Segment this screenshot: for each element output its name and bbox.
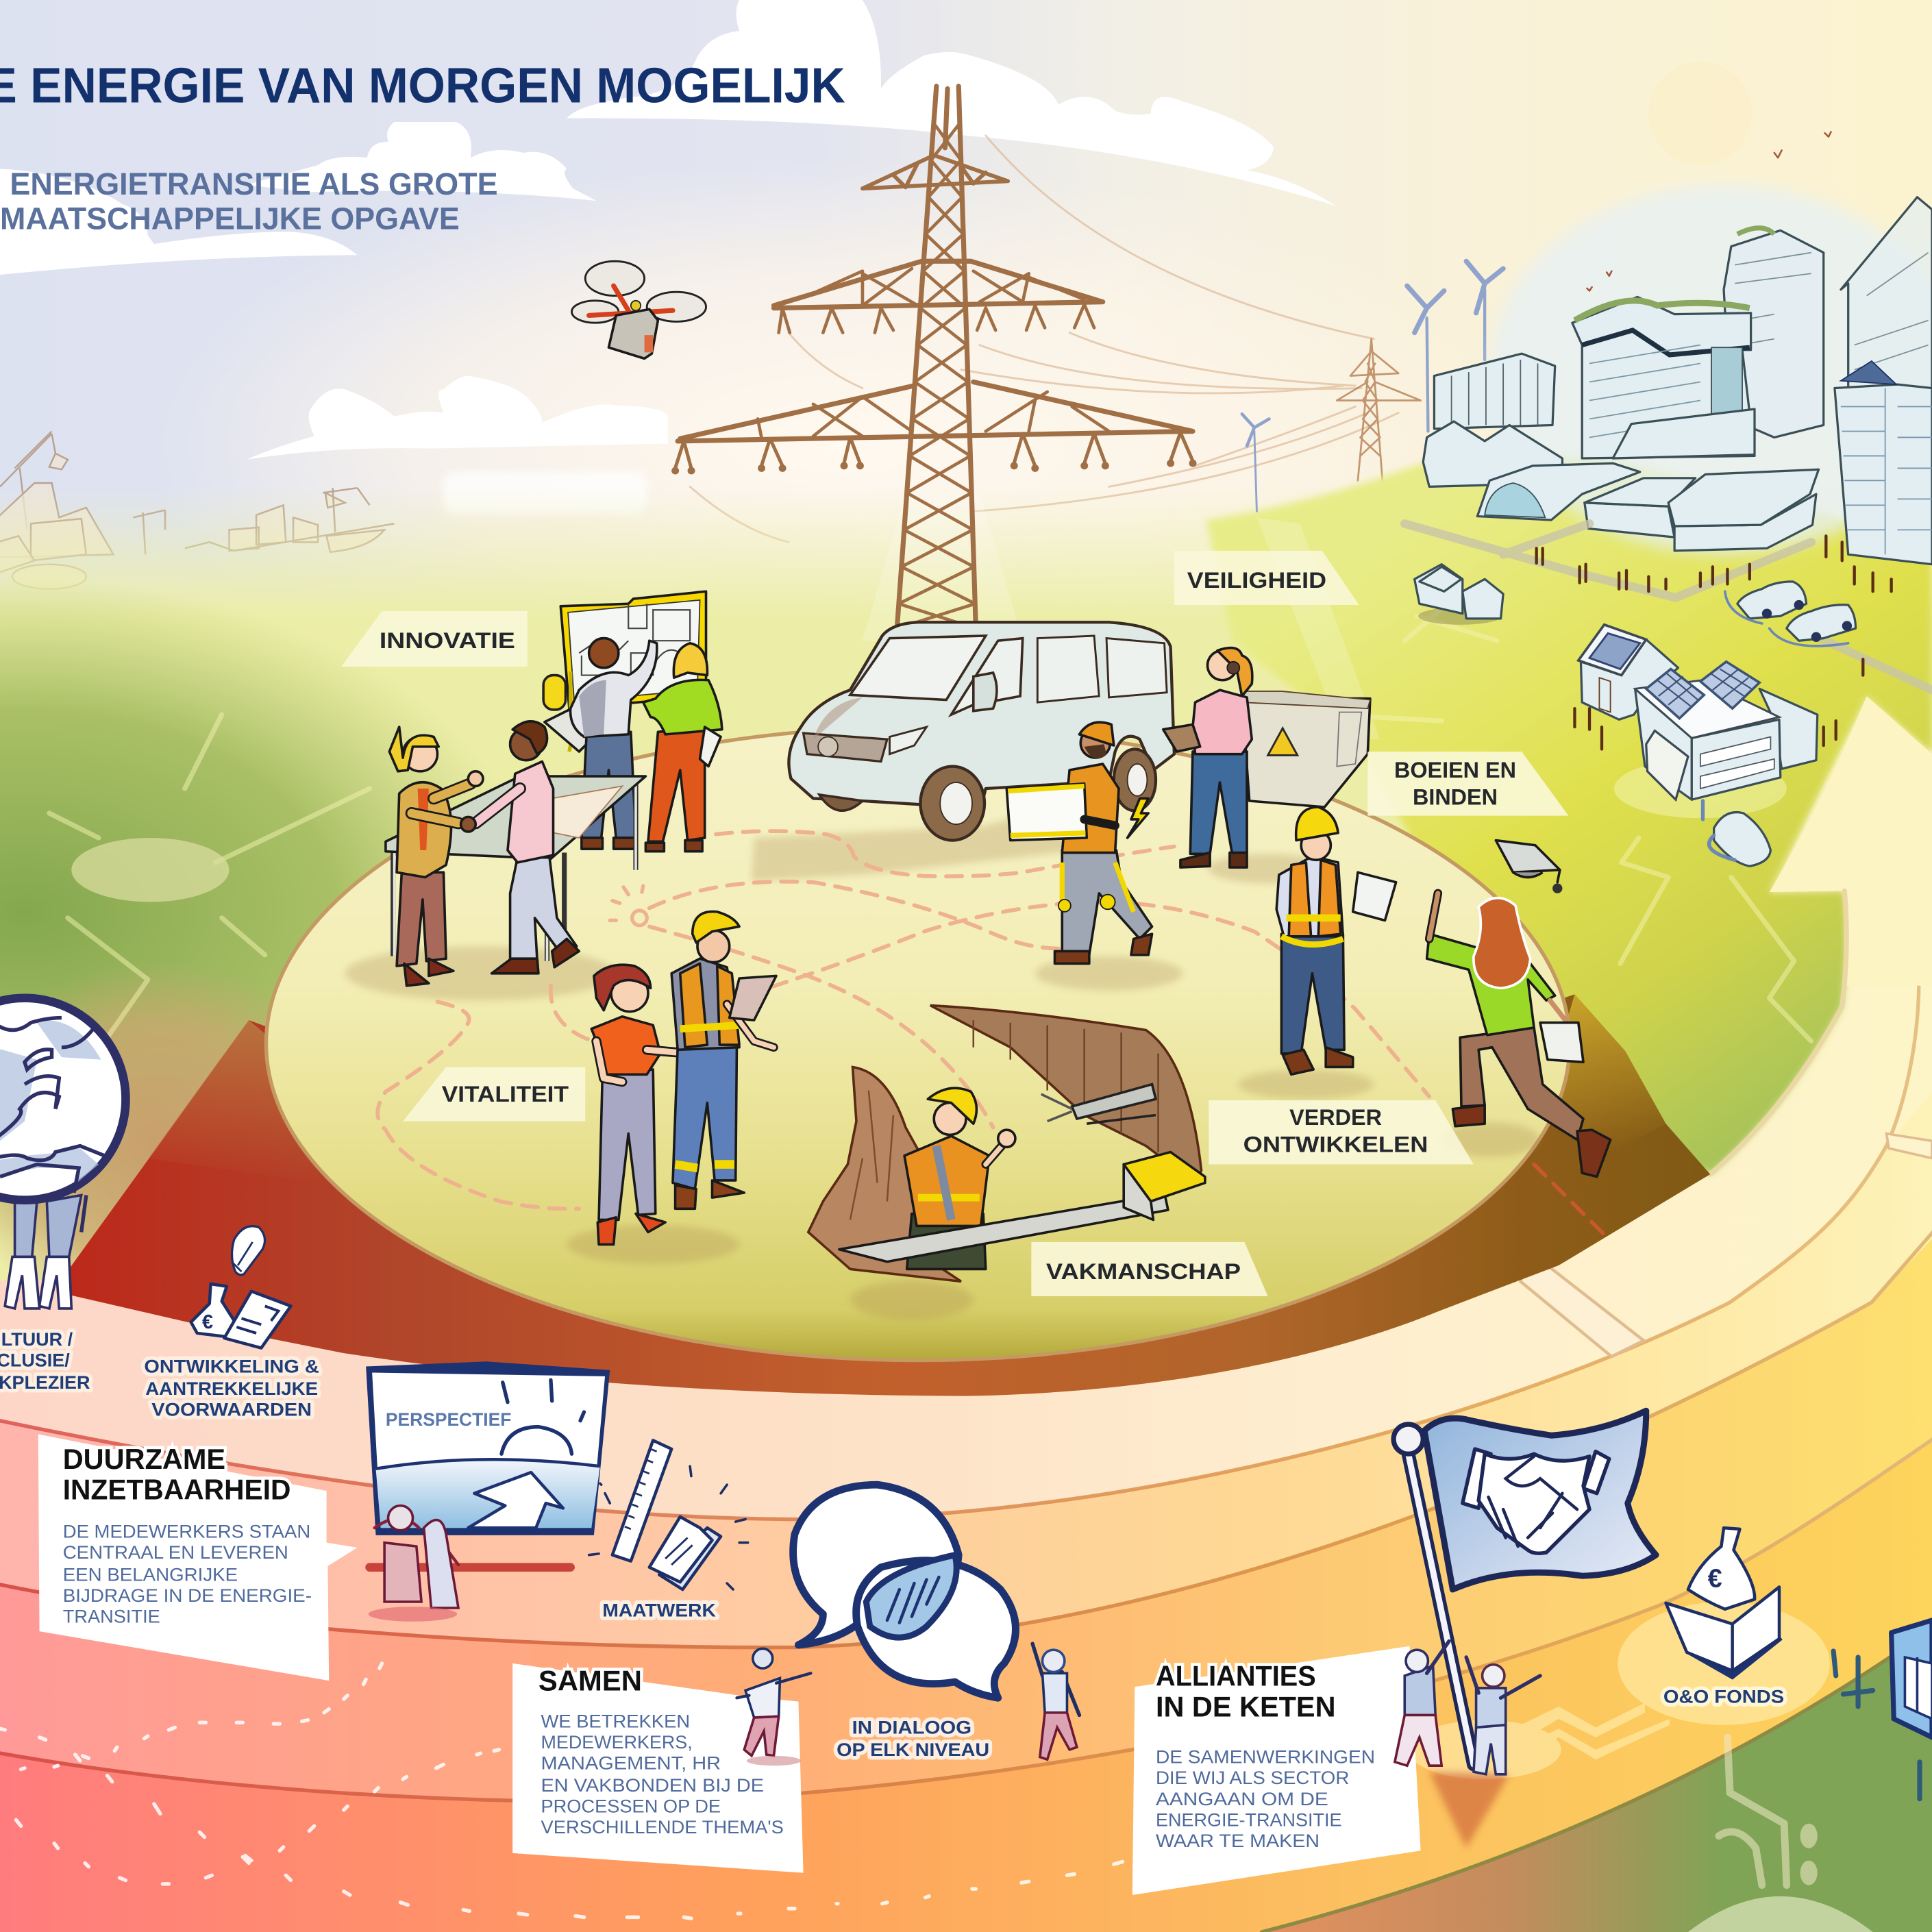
person left of pole bbox=[1395, 1642, 1449, 1766]
middle arm bbox=[773, 261, 1103, 333]
pale circuit marks bbox=[49, 604, 1811, 1041]
ring contour lines bbox=[0, 932, 1932, 1932]
flag with handshake bbox=[1394, 1411, 1656, 1848]
turbine one bbox=[1407, 286, 1444, 431]
clouds bbox=[0, 0, 1336, 514]
green outer corner bbox=[1232, 1589, 1932, 1932]
town people bbox=[1537, 536, 1892, 749]
body text: EEN BELANGRIJKE bbox=[63, 1564, 238, 1585]
text: in dialoog op elk niveau bbox=[837, 1717, 989, 1760]
heading: INZETBAARHEID bbox=[63, 1474, 290, 1506]
small farm house bbox=[1415, 565, 1503, 625]
pale ground decorations on ring bbox=[1409, 1602, 1830, 1779]
label: vitaliteit: VITALITEIT bbox=[442, 1082, 569, 1106]
body text: DE MEDEWERKERS STAAN bbox=[63, 1521, 310, 1541]
dashed routes on disc bbox=[377, 831, 1608, 1238]
pylon tower bbox=[897, 86, 976, 628]
text: cultuur inclusie werkplezier bbox=[0, 1329, 90, 1393]
heading: SAMEN bbox=[538, 1665, 642, 1697]
heading bbox=[1156, 1660, 1336, 1722]
body text: CENTRAAL EN LEVEREN bbox=[63, 1542, 288, 1563]
main pylon bbox=[676, 86, 1193, 628]
body text: MEDEWERKERS, bbox=[541, 1732, 693, 1753]
label: verder ontwikkelen: ONTWIKKELEN bbox=[1243, 1132, 1428, 1157]
title: E ENERGIE VAN MORGEN MOGELIJK bbox=[0, 58, 845, 113]
body text: MANAGEMENT, HR bbox=[541, 1753, 721, 1774]
cable sleeves bbox=[1041, 1085, 1156, 1124]
icon: ruler and documents bbox=[589, 1440, 748, 1589]
white dotted path in red zone bbox=[0, 1663, 1122, 1918]
people under globe bbox=[5, 1196, 86, 1309]
icon: money and contract: € bbox=[202, 1311, 213, 1333]
lower terrace bbox=[1613, 409, 1755, 458]
shadow under flag bbox=[1429, 1772, 1509, 1848]
bubble two bbox=[856, 1561, 1015, 1698]
charging car bbox=[1702, 801, 1770, 866]
running woman bbox=[1427, 893, 1611, 1177]
houses row bbox=[1423, 421, 1562, 486]
man in pink jacket bbox=[461, 721, 579, 974]
perspectief board bbox=[366, 1361, 610, 1535]
body text bbox=[1156, 1747, 1375, 1851]
body text bbox=[541, 1711, 784, 1837]
icon: lightbulb bbox=[232, 1226, 265, 1275]
table with plans bbox=[386, 776, 645, 961]
label: innovatie: INNOVATIE bbox=[380, 628, 515, 653]
subtitle: ENERGIETRANSITIE ALS GROTE bbox=[10, 166, 498, 201]
future city bbox=[1404, 185, 1932, 690]
body text: AANGAAN OM DE bbox=[1156, 1789, 1328, 1809]
drone bbox=[571, 261, 706, 358]
money box bbox=[1666, 1528, 1782, 1679]
text: maatwerk: MAATWERK bbox=[602, 1600, 716, 1621]
trench dirt bbox=[930, 1006, 1202, 1183]
body text: EN VAKBONDEN BIJ DE bbox=[541, 1775, 764, 1796]
low roof building right bbox=[1668, 469, 1819, 551]
first ring band bbox=[0, 696, 1932, 1520]
girl with orange shirt bbox=[591, 965, 702, 1244]
route start marker bbox=[610, 886, 647, 926]
mound under disc bbox=[59, 994, 1710, 1396]
board bbox=[560, 591, 706, 752]
body text: WE BETREKKEN bbox=[541, 1711, 690, 1731]
ground hills bbox=[0, 486, 1932, 1349]
road bbox=[1404, 523, 1932, 690]
label: vakmanschap bbox=[1031, 1242, 1268, 1296]
van rear wheel bbox=[1114, 749, 1156, 810]
house one bbox=[1578, 625, 1679, 719]
body text: BIJDRAGE IN DE ENERGIE- bbox=[63, 1585, 312, 1606]
text: ontwikkeling en aantrekkelijke voorwaarden bbox=[144, 1356, 319, 1420]
two people at board bbox=[369, 1506, 458, 1622]
worker with exoskeleton and box bbox=[1006, 722, 1152, 963]
roll and keyboard bbox=[543, 676, 591, 752]
distant pylon bbox=[1337, 339, 1421, 480]
handshake icon bbox=[1463, 1449, 1609, 1553]
turbine three bbox=[1242, 414, 1269, 511]
label: vakmanschap: VAKMANSCHAP bbox=[1046, 1259, 1241, 1284]
van bbox=[789, 622, 1174, 841]
man at board bbox=[571, 639, 657, 849]
person walking on samen card bbox=[736, 1648, 810, 1766]
person waving bbox=[1032, 1644, 1079, 1759]
pale circuit in green corner bbox=[1688, 1737, 1873, 1932]
globe carried by people bbox=[0, 998, 125, 1309]
turbine two bbox=[1466, 261, 1503, 360]
worker in trench bbox=[904, 1088, 1015, 1269]
trench with worker bbox=[808, 1006, 1205, 1281]
panel: duurzame inzetbaarheid bbox=[38, 1434, 358, 1681]
glow behind city bbox=[1491, 185, 1932, 554]
body text bbox=[63, 1521, 312, 1627]
worker with tablet bbox=[671, 912, 776, 1209]
label: boeien en binden: BINDEN bbox=[1413, 784, 1498, 809]
panel: allianties in de keten bbox=[1132, 1646, 1421, 1895]
label: verder ontwikkelen: VERDER bbox=[1289, 1105, 1382, 1130]
label: vitaliteit bbox=[403, 1067, 585, 1122]
speech bubbles bbox=[793, 1485, 1015, 1698]
flag cloth bbox=[1424, 1411, 1656, 1589]
body text: PROCESSEN OP DE bbox=[541, 1796, 721, 1817]
pole bbox=[1409, 1454, 1474, 1764]
green land inside ring, right side bbox=[1206, 456, 1932, 1174]
low roof building left bbox=[1585, 478, 1696, 537]
money box: € bbox=[1708, 1564, 1722, 1593]
body text: WAAR TE MAKEN bbox=[1156, 1831, 1320, 1851]
text: cultuur inclusie werkplezier: LTUUR / bbox=[1, 1329, 73, 1350]
far tower right bbox=[1841, 197, 1932, 395]
van wheel bbox=[920, 767, 984, 841]
electric cars bbox=[1725, 582, 1855, 646]
text: in dialoog op elk niveau: IN DIALOOG bbox=[852, 1717, 971, 1737]
bubble one bbox=[793, 1485, 958, 1645]
subtitle bbox=[0, 166, 498, 236]
woman in green bbox=[643, 643, 722, 852]
red shadow bar bbox=[370, 1565, 571, 1570]
text: cultuur inclusie werkplezier: KPLEZIER bbox=[0, 1372, 90, 1393]
subtitle: MAATSCHAPPELIJKE OPGAVE bbox=[0, 201, 460, 236]
text: ontwikkeling en aantrekkelijke voorwaarden: ONTWIKKELING & bbox=[144, 1356, 319, 1376]
heading: DUURZAME bbox=[63, 1444, 225, 1475]
text: in dialoog op elk niveau: OP ELK NIVEAU bbox=[837, 1739, 989, 1760]
small birds bbox=[1587, 132, 1831, 290]
heading: IN DE KETEN bbox=[1156, 1691, 1336, 1722]
wind turbines bbox=[1242, 261, 1503, 511]
outer ring band bbox=[0, 696, 1932, 1932]
car two bbox=[1787, 605, 1855, 642]
graduation cap bbox=[1496, 841, 1562, 893]
panel: samen bbox=[512, 1663, 804, 1873]
lower arm bbox=[676, 382, 1193, 471]
body text: TRANSITIE bbox=[63, 1607, 160, 1627]
text: o&o fonds: O&O FONDS bbox=[1663, 1686, 1784, 1707]
house two bbox=[1635, 662, 1818, 800]
body text: ENERGIE-TRANSITIE bbox=[1156, 1809, 1342, 1830]
heading: ALLIANTIES bbox=[1156, 1660, 1316, 1692]
inner ring edge line bbox=[1710, 891, 1846, 1174]
pipe and yellow box bbox=[839, 1152, 1205, 1262]
front tower bbox=[1835, 361, 1932, 565]
right blue building with figures bbox=[1833, 1620, 1932, 1799]
overlap lens bbox=[866, 1555, 956, 1637]
label: veiligheid bbox=[1174, 551, 1359, 605]
text: ontwikkeling en aantrekkelijke voorwaarden: VOORWAARDEN bbox=[151, 1399, 312, 1420]
pale arrow of the ring bbox=[1770, 696, 1932, 986]
light beams bbox=[863, 493, 1380, 739]
third ring band bbox=[0, 696, 1932, 1802]
sun bbox=[1648, 62, 1752, 165]
body text: VERSCHILLENDE THEMA'S bbox=[541, 1817, 784, 1837]
icon: money and contract bbox=[191, 1284, 290, 1348]
far tower mid bbox=[1724, 228, 1824, 437]
heading bbox=[63, 1444, 290, 1506]
second ring band bbox=[0, 696, 1932, 1648]
central disc bbox=[266, 727, 1570, 1361]
text: ontwikkeling en aantrekkelijke voorwaarden: AANTREKKELIJKE bbox=[145, 1378, 318, 1399]
top arm bbox=[863, 156, 1008, 188]
innovation group bbox=[386, 591, 722, 986]
clipboard worker bbox=[1276, 807, 1396, 1074]
label: verder ontwikkelen bbox=[1209, 1100, 1474, 1165]
disc shadows bbox=[345, 789, 1540, 1320]
ring fold tabs bbox=[1520, 1134, 1932, 1357]
label: boeien en binden: BOEIEN EN bbox=[1394, 758, 1516, 782]
woman in yellow jacket bbox=[389, 727, 483, 986]
greenhouse bbox=[1477, 463, 1640, 520]
label: innovatie bbox=[341, 611, 528, 667]
car one bbox=[1737, 582, 1807, 619]
woman with headset bbox=[1163, 648, 1252, 867]
pale cloud on green left bbox=[71, 838, 230, 902]
transformer box bbox=[1242, 691, 1370, 807]
person right of pole bbox=[1466, 1657, 1540, 1774]
faded old city bbox=[0, 431, 395, 589]
solar houses bbox=[1578, 625, 1818, 866]
overhead wires bbox=[690, 136, 1398, 542]
globe continents bbox=[0, 1018, 105, 1193]
big green roof building bbox=[1572, 297, 1755, 458]
label: veiligheid: VEILIGHEID bbox=[1187, 568, 1326, 593]
perspectief board: PERSPECTIEF bbox=[386, 1409, 511, 1430]
label: boeien en binden bbox=[1367, 752, 1568, 816]
long hall bbox=[1434, 354, 1555, 429]
body text: DIE WIJ ALS SECTOR bbox=[1156, 1768, 1349, 1788]
body text: DE SAMENWERKINGEN bbox=[1156, 1747, 1375, 1768]
